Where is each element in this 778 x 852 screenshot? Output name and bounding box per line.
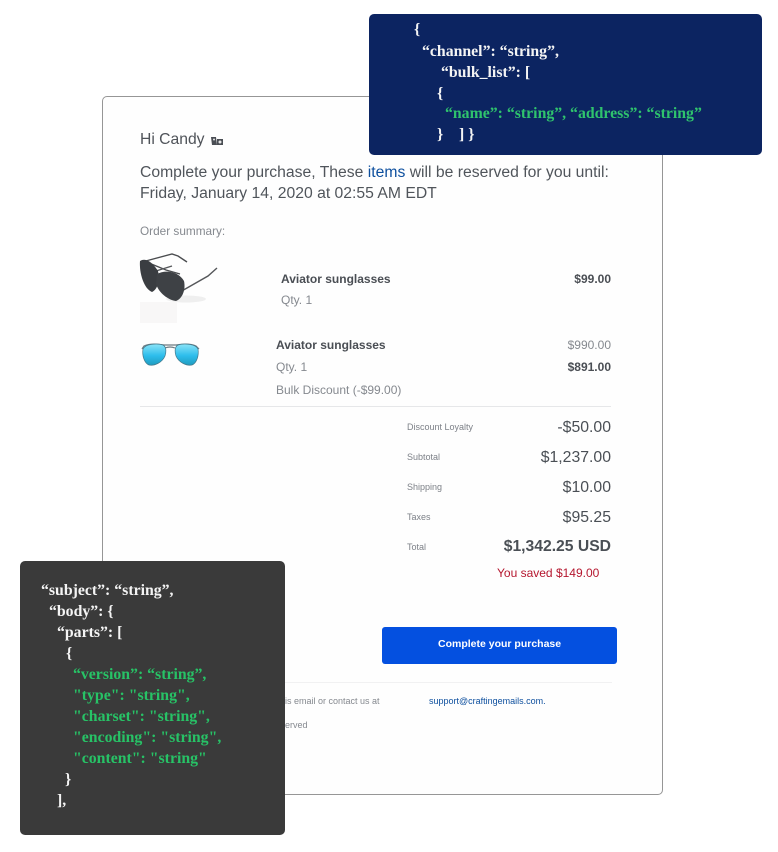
greeting: Hi Candy: [140, 131, 205, 148]
code: charset: "charset": "string",: [73, 708, 210, 725]
panel: navy JSON code: [369, 14, 762, 155]
code: opening brace: {: [66, 645, 72, 662]
value: shipping: $10.00: [563, 479, 611, 496]
label: discount loyalty: Discount Loyalty: [407, 422, 473, 432]
item 1 quantity: Qty. 1: [281, 293, 312, 307]
code: bulk list: “bulk_list”: [: [441, 64, 530, 81]
item 2 bulk discount: Bulk Discount (-$99.00): [276, 383, 401, 397]
panel: email card: [102, 96, 663, 795]
code: content: "content": "string": [73, 750, 207, 767]
value: discount loyalty: -$50.00: [557, 419, 611, 436]
item 2 discounted price: $891.00: [568, 360, 611, 374]
code: subject: “subject”: “string”,: [41, 582, 174, 599]
item 2 quantity: Qty. 1: [276, 360, 307, 374]
icon: shopping bags: [211, 137, 223, 145]
label: shipping: Shipping: [407, 482, 442, 492]
button: complete your purchase: [382, 627, 617, 664]
code: name and address: “name”: “string”, “address”: “string”: [445, 105, 702, 122]
code: closing bracket: ],: [57, 792, 66, 809]
code: encoding: "encoding": "string",: [73, 729, 221, 746]
footer support link: support@craftingemails.com.: [429, 696, 546, 706]
footer contact text: is email or contact us at: [285, 696, 380, 706]
value: total: $1,342.25 USD: [504, 538, 611, 555]
label: taxes: Taxes: [407, 512, 431, 522]
intro text: [140, 164, 609, 202]
value: taxes: $95.25: [563, 509, 611, 526]
icon: black aviator sunglasses: [140, 253, 218, 302]
value: subtotal: $1,237.00: [541, 449, 611, 466]
intro text: Complete your purchase, These items will be reserved for you until:: [140, 164, 609, 181]
item 2 original price: $990.00: [568, 338, 611, 352]
label: total: Total: [407, 542, 426, 552]
code: closing brace: }: [65, 771, 71, 788]
item 2 name: Aviator sunglasses: [276, 338, 386, 352]
item 1 price: $99.00: [574, 272, 611, 286]
code: closing braces: } ] }: [437, 126, 474, 143]
footer rights text: erved: [285, 720, 308, 730]
code: inner brace: {: [437, 85, 443, 102]
icon: blue aviator sunglasses: [142, 344, 200, 366]
code: body: “body”: {: [49, 603, 114, 620]
code: channel: “channel”: “string”,: [422, 43, 559, 60]
code: version: “version”: “string”,: [73, 666, 206, 683]
label: subtotal: Subtotal: [407, 452, 440, 462]
panel: dark JSON code: [20, 561, 285, 835]
code: type: "type": "string",: [73, 687, 190, 704]
code: parts: “parts”: [: [57, 624, 122, 641]
item 1 name: Aviator sunglasses: [281, 272, 391, 286]
intro text: Friday, January 14, 2020 at 02:55 AM EDT: [140, 185, 437, 202]
order summary heading: Order summary:: [140, 224, 225, 238]
button: complete your purchase: Complete your purchase: [438, 638, 561, 650]
savings note: You saved $149.00: [497, 566, 599, 580]
code: opening brace: {: [414, 21, 420, 38]
